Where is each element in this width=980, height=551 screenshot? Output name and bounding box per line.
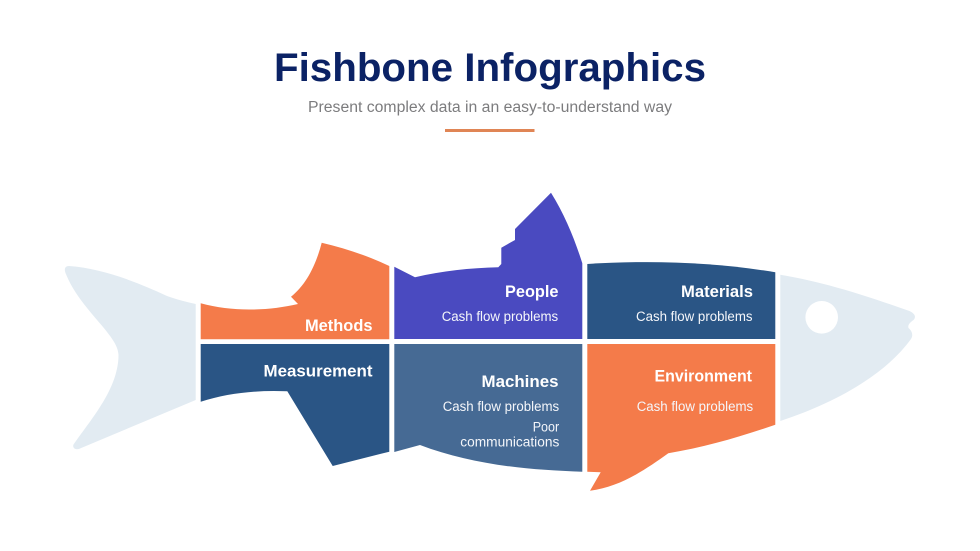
panel: measurement (201, 344, 389, 466)
fish head with eye (780, 275, 915, 421)
title accent rule (445, 129, 534, 132)
machines text second item: Poor (533, 420, 560, 434)
panel: environment (587, 344, 775, 491)
machines label: Machines (482, 372, 558, 391)
panel: methods (201, 243, 389, 339)
measurement label: Measurement (264, 362, 373, 380)
materials text: Cash flow problems (636, 309, 753, 324)
fish tail (65, 266, 196, 449)
methods label: Methods (305, 316, 372, 335)
measurement shape (201, 344, 389, 466)
materials shape (587, 262, 775, 339)
environment label: Environment (654, 366, 752, 386)
environment text: Cash flow problems (637, 399, 753, 414)
title: Fishbone Infographics (274, 46, 706, 90)
environment shape (587, 344, 775, 491)
machines text: Cash flow problems (443, 399, 559, 414)
materials label: Materials (681, 282, 753, 301)
machines shape (394, 344, 582, 472)
head shape (780, 275, 915, 421)
machines text second line: communications (460, 434, 560, 450)
people label: People (505, 282, 558, 301)
people text: Cash flow problems (442, 309, 558, 324)
methods shape (201, 243, 389, 339)
panel: materials (587, 262, 775, 339)
panel: people (394, 193, 582, 339)
people shape (394, 193, 582, 339)
icon: eye (805, 301, 838, 334)
subtitle: Present complex data in an easy-to-understand way (308, 99, 672, 116)
panel: machines (394, 344, 582, 472)
